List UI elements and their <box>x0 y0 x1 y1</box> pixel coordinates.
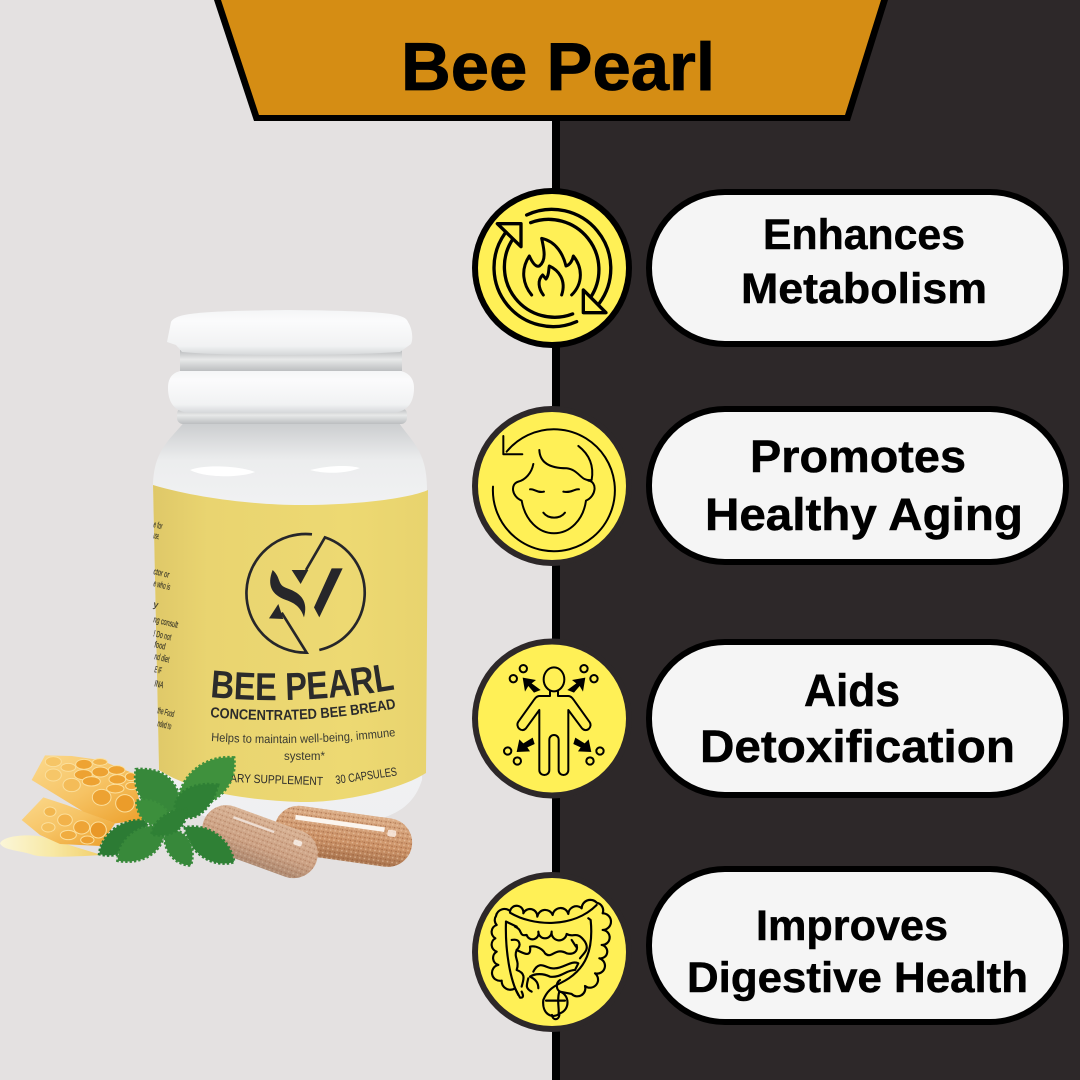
pill: enhances metabolism <box>649 192 1066 344</box>
label side fine print: ! Do not <box>153 628 173 642</box>
icon: intestines <box>472 872 632 1032</box>
pill: promotes healthy aging: Promotes <box>750 431 966 482</box>
label side fine print: ng consult <box>153 614 179 630</box>
leaf: left lower dark <box>99 820 148 855</box>
upper cap <box>167 310 412 355</box>
label side fine print: the Food <box>157 705 175 719</box>
label subtitle: CONCENTRATED BEE BREAD <box>211 699 395 720</box>
pill: aids detoxification: Aids <box>804 665 900 716</box>
food group <box>0 755 415 885</box>
label side fine print: y <box>153 599 160 610</box>
pill: enhances metabolism: Metabolism <box>741 265 987 313</box>
lower neck groove <box>177 408 407 424</box>
pill: enhances metabolism: Enhances <box>763 211 965 259</box>
bottle body <box>153 420 427 826</box>
title: Bee Pearl <box>401 29 715 105</box>
capsule right <box>271 803 415 870</box>
shoulder highlights <box>190 466 360 476</box>
leaf: small mid left <box>137 800 172 826</box>
pill: aids detoxification: Detoxification <box>700 721 1015 772</box>
mint leaves <box>99 757 234 865</box>
label side fine print: nd diet <box>154 651 171 665</box>
label side fine print: ctor or <box>153 566 170 580</box>
leaf: lower right <box>185 827 234 863</box>
panel: dark right background <box>552 0 1080 1080</box>
pill: promotes healthy aging <box>649 409 1066 562</box>
cap groove <box>180 350 402 371</box>
leaf: lower left <box>118 825 165 861</box>
label claim: Helps to maintain well-being, immune <box>212 730 395 744</box>
product: supplement bottle with honeycomb, mint and capsules <box>0 310 428 878</box>
icon: body expelling toxins <box>472 638 632 798</box>
icon: face with reverse arrow <box>472 406 632 566</box>
benefit 4: improves digestive health <box>472 869 1066 1032</box>
benefit 1: enhances metabolism <box>472 188 1066 348</box>
panel: light left background <box>0 0 552 1080</box>
product: supplement bottle with honeycomb, mint and capsules: 30 CAPSULES <box>334 764 398 787</box>
honeycomb lower piece <box>22 797 115 846</box>
label side fine print <box>153 519 179 731</box>
lower cap ring <box>168 370 414 413</box>
centre divider <box>552 100 560 1080</box>
leaf: upper left <box>135 769 180 812</box>
label side fine print: nded to <box>157 718 173 731</box>
pill: improves digestive health: Digestive Health <box>687 954 1028 1002</box>
leaf: upper right <box>177 757 234 807</box>
benefit 2: promotes healthy aging <box>472 406 1066 566</box>
product: supplement bottle with honeycomb, mint and capsules: system* <box>284 749 325 763</box>
pill: improves digestive health: Improves <box>756 902 948 950</box>
label logo <box>246 534 365 653</box>
capsule left <box>195 798 325 885</box>
label side fine print: INA <box>154 678 165 690</box>
label product name: BEE PEARL <box>212 664 394 700</box>
label side fine print: food <box>154 639 167 652</box>
label side fine print: e who is <box>153 578 172 592</box>
label side fine print: use. <box>153 530 161 541</box>
pill: improves digestive health <box>649 869 1066 1022</box>
honeycomb upper piece <box>32 755 145 823</box>
label side fine print: e for <box>153 519 164 531</box>
honey puddle <box>0 835 102 857</box>
pill: aids detoxification <box>649 642 1066 795</box>
leaf: bottom centre <box>165 829 192 865</box>
icon: metabolism flame with cycle arrows <box>472 188 632 348</box>
pill: promotes healthy aging: Healthy Aging <box>705 489 1023 540</box>
bottle label <box>153 485 428 802</box>
label side fine print: E IF <box>154 664 163 676</box>
leaf: middle right <box>175 784 218 818</box>
benefit 3: aids detoxification <box>472 638 1066 798</box>
label footer: ARY SUPPLEMENT <box>230 771 324 788</box>
title banner <box>214 0 888 121</box>
leaf: small centre <box>152 809 186 835</box>
